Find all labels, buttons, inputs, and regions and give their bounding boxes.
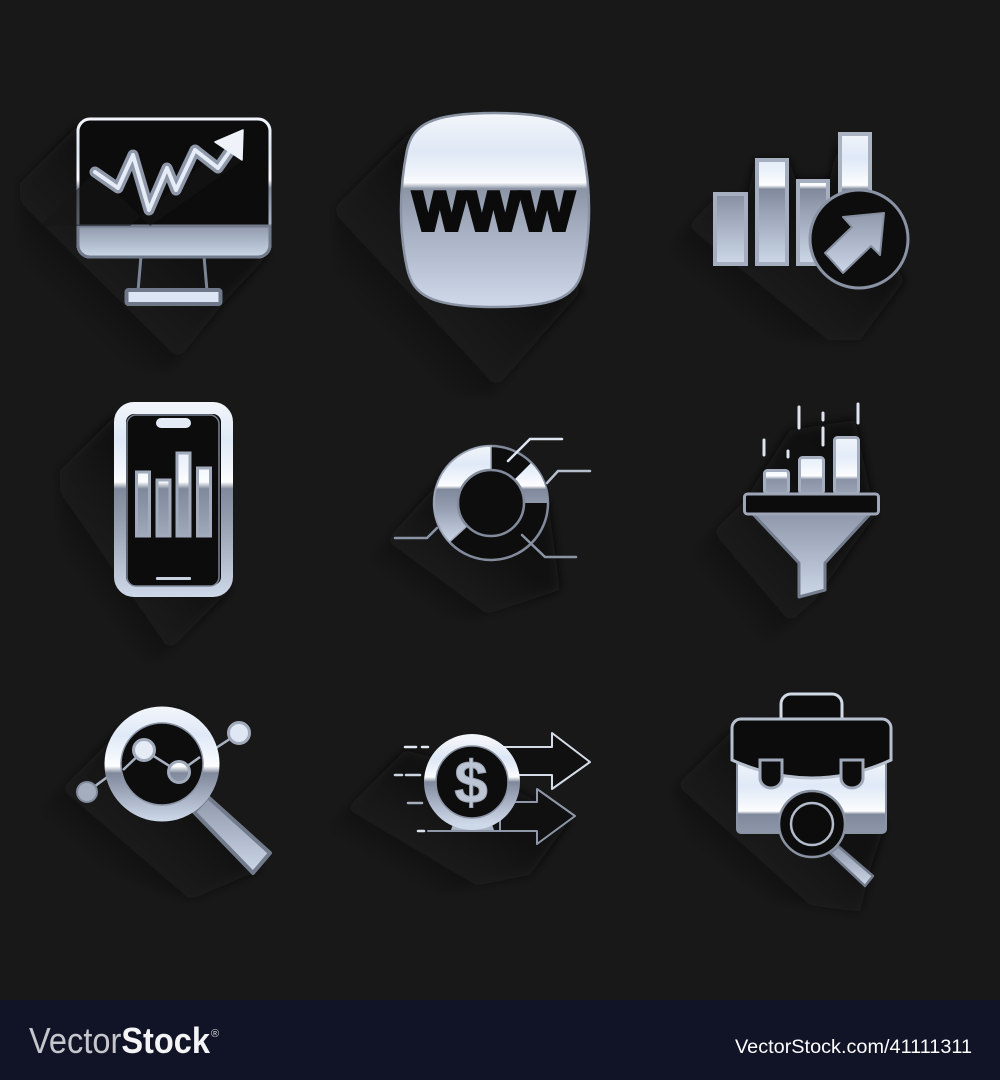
bar 3 bbox=[798, 181, 828, 264]
arrow badge bbox=[810, 190, 908, 288]
monitor body bbox=[78, 119, 270, 257]
funnel bars bbox=[764, 438, 858, 494]
icon: funnel with bars bbox=[680, 404, 878, 650]
vectorstock logo: VectorStock bbox=[29, 1020, 211, 1061]
bar 1 bbox=[715, 194, 746, 264]
funnel shadow bbox=[680, 420, 875, 650]
case handle bbox=[781, 694, 842, 718]
search lens back bbox=[779, 791, 845, 857]
funnel lip bbox=[744, 494, 878, 514]
case body bbox=[737, 740, 886, 833]
large silver segment bbox=[434, 446, 491, 542]
lower arrow bbox=[428, 789, 575, 844]
image id: VectorStock.com/41111311 bbox=[735, 1036, 972, 1058]
chart node mid bbox=[134, 740, 154, 760]
speaker pill bbox=[156, 418, 191, 428]
bar 4 bbox=[840, 134, 870, 196]
left clasp bbox=[760, 760, 782, 788]
icon: briefcase with magnifier bbox=[672, 694, 891, 912]
phone shadow bbox=[60, 415, 230, 660]
chart shadow bbox=[660, 140, 905, 340]
monitor lower panel bbox=[78, 226, 270, 257]
badge plate bbox=[401, 113, 589, 307]
phone body bbox=[120, 408, 227, 591]
inner chart links bbox=[123, 750, 200, 772]
search lens ring bbox=[791, 803, 833, 845]
chart node left bbox=[77, 782, 97, 802]
badge shadow bbox=[335, 130, 582, 395]
donut hole bbox=[458, 470, 524, 536]
monitor stand bbox=[138, 256, 207, 291]
case flap bbox=[732, 719, 891, 778]
falling dashes bbox=[764, 404, 858, 457]
donut shadow bbox=[355, 470, 560, 620]
search handle bbox=[830, 846, 873, 886]
coin inner edge bbox=[436, 746, 508, 818]
footer bar bbox=[0, 1000, 1000, 1080]
chart node low bbox=[168, 762, 190, 782]
upper arrow bbox=[500, 733, 590, 789]
icon: magnifier over line chart bbox=[40, 710, 270, 900]
registered mark: ® bbox=[211, 1028, 219, 1040]
magnifier handle bbox=[194, 797, 270, 873]
coin ring bbox=[430, 740, 514, 824]
coin shadow bbox=[325, 750, 570, 895]
chart arrow head bbox=[215, 130, 243, 160]
monitor base bbox=[126, 290, 220, 304]
leader lines bbox=[395, 439, 590, 557]
phone inner edge bbox=[127, 415, 219, 586]
donut ring outline bbox=[434, 446, 548, 560]
briefcase shadow bbox=[672, 720, 885, 912]
phone bars bbox=[136, 453, 210, 536]
up-right arrow bbox=[825, 213, 884, 273]
chart node right bbox=[228, 722, 250, 744]
www label: WWW bbox=[413, 180, 574, 242]
chart line shadow bbox=[40, 130, 243, 226]
home indicator bbox=[156, 577, 191, 580]
icon: monitor with rising chart bbox=[20, 119, 270, 370]
speed dashes bbox=[395, 747, 428, 831]
small silver segment bbox=[514, 463, 548, 503]
icon: dollar coin with arrows bbox=[325, 733, 590, 895]
coin base bbox=[451, 818, 494, 830]
icon: phone with bar chart bbox=[60, 408, 230, 660]
right clasp bbox=[841, 760, 863, 788]
bar 2 bbox=[757, 160, 787, 264]
lens ring bbox=[113, 715, 211, 813]
icon: www badge bbox=[335, 113, 589, 395]
dollar sign: $ bbox=[454, 749, 488, 816]
funnel cone bbox=[753, 514, 870, 597]
lens interior bbox=[121, 723, 203, 805]
rising chart line bbox=[95, 148, 232, 210]
icon: bar chart with arrow bbox=[660, 134, 908, 340]
magnifier shadow bbox=[40, 710, 260, 900]
monitor shadow bbox=[20, 125, 268, 370]
icon: donut chart with leaders bbox=[355, 439, 590, 620]
chart links bbox=[87, 733, 239, 792]
